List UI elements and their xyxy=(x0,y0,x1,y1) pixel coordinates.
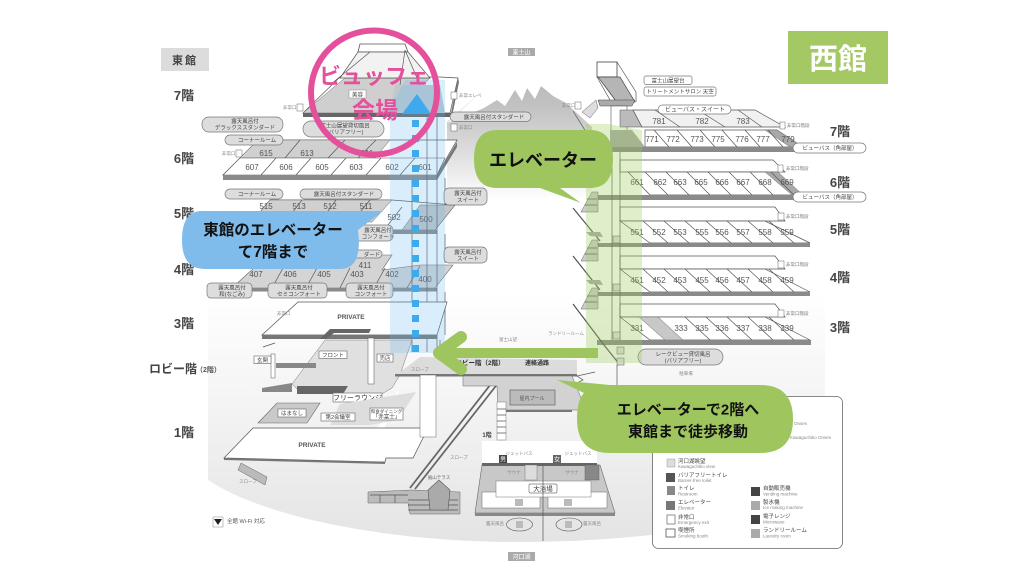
callout: east elevator: 東館のエレベーター xyxy=(203,220,343,239)
east wing: 4th floor: 407 xyxy=(249,270,263,279)
west wing: 4th floor: 458 xyxy=(758,276,772,285)
tag: standard 5F xyxy=(300,189,382,199)
east wing: 6th floor: 615 xyxy=(259,149,273,158)
west wing: 6th floor: 667 xyxy=(736,178,750,187)
callout: west elevator: エレベーター xyxy=(489,150,597,170)
east wing: emergency exit marks: 非常エレベ xyxy=(459,92,482,99)
west wing: 5th floor: 559 xyxy=(780,228,794,237)
west wing: 6th floor xyxy=(597,160,809,200)
floor labels: west: 7階 xyxy=(830,124,850,139)
west wing: 5th floor: 556 xyxy=(715,228,729,237)
floor labels: west: 4階 xyxy=(830,270,850,285)
legend: emergency exit: 非常口 xyxy=(678,513,695,521)
east wing: 4th floor: 403 xyxy=(350,270,364,279)
east wing: 5th floor: 511 xyxy=(360,202,373,211)
label: free lounge: フリーラウンジ xyxy=(333,394,382,402)
indoor pool xyxy=(463,376,586,440)
lake tag: 河口湖 xyxy=(512,553,531,561)
west wing: 6th floor: 662 xyxy=(653,178,667,187)
west wing: 7th floor: 783 xyxy=(736,117,750,126)
tag: deluxe standard: デラックススタンダード xyxy=(215,124,275,132)
tag: observation deck: 富士山展望台 xyxy=(651,76,685,84)
tag: suite 4F xyxy=(444,247,487,263)
tag: observation deck xyxy=(644,76,692,84)
floor labels: east xyxy=(149,48,221,440)
bath hall: 女 xyxy=(554,456,560,464)
bath hall: ジェットバス xyxy=(564,451,592,457)
west wing: 5th floor: 553 xyxy=(673,228,687,237)
callout: buffet venue circle: ビュッフェ xyxy=(319,64,429,89)
floor labels: west xyxy=(830,124,850,335)
west wing: 4th floor: 非常口階段 xyxy=(786,261,809,268)
tag: lake view private bath: (バリアフリー) xyxy=(665,358,701,364)
floor labels: east: 7階 xyxy=(174,88,194,103)
building: west wing xyxy=(499,62,866,398)
east wing: 4th floor: 402 xyxy=(385,270,399,279)
tag: corner room 5F xyxy=(225,189,283,199)
tag: Fuji view private bath: (バリアフリー) xyxy=(327,129,363,136)
bath hall: ジェットバス xyxy=(506,451,533,457)
west wing: 6th floor: 669 xyxy=(780,178,794,187)
arrow: route to east wing xyxy=(439,337,598,369)
east wing: 3rd floor private: PRIVATE xyxy=(337,314,365,321)
legend: microwave: Microwave xyxy=(763,520,785,524)
legend panel: Kawaguchiko Onsen xyxy=(790,435,832,440)
tag: corner room 6F: コーナールーム xyxy=(238,137,277,144)
east wing: first floor: スロープ xyxy=(450,455,468,461)
east wing: 3rd floor private xyxy=(262,302,447,339)
west wing: 3rd floor: 331 xyxy=(630,324,644,333)
tag: lake view private bath xyxy=(638,349,723,365)
east wing: 4th floor: 405 xyxy=(317,270,331,279)
west wing: 7th floor: 781 xyxy=(652,117,666,126)
label: dining akafuji: 「赤富士」 xyxy=(373,412,400,420)
floor labels: east: 3階 xyxy=(174,316,194,331)
tag: semi comfort 4F: セミコンフォート xyxy=(277,291,321,298)
west wing: 6th floor: 663 xyxy=(673,178,687,187)
tag: deluxe standard: 露天風呂付 xyxy=(231,117,259,125)
east wing: 6th floor: 601 xyxy=(418,163,432,172)
west wing: 4th floor xyxy=(597,256,810,296)
tag: deluxe standard xyxy=(202,117,283,132)
callout: buffet venue circle xyxy=(311,30,437,154)
east wing: first floor: PRIVATE xyxy=(298,442,326,449)
east wing: emergency exit marks: 非常口 xyxy=(562,102,576,109)
east wing: 4th floor xyxy=(225,255,453,292)
east wing: emergency exit marks: 非常口 xyxy=(222,150,236,157)
bath hall: 露天風呂 xyxy=(583,521,601,527)
tag: suite 4F: スイート xyxy=(457,256,479,262)
west wing: 7th floor xyxy=(610,110,810,152)
west wing: 3rd floor: 338 xyxy=(758,324,772,333)
floor labels: west: 5階 xyxy=(830,222,850,237)
bath hall: サウナ xyxy=(565,469,579,476)
west wing: 3rd floor: 337 xyxy=(736,324,750,333)
west wing: 4th floor: 459 xyxy=(780,276,794,285)
label: shop: 売店 xyxy=(379,354,391,362)
legend: ice machine xyxy=(751,498,804,510)
east wing: 5th floor: 500 xyxy=(419,215,433,224)
east wing: emergency exit marks: 非常口 xyxy=(283,104,296,111)
east wing: 4th floor: 406 xyxy=(283,270,297,279)
floor labels: east: （2階） xyxy=(196,366,221,374)
slope block xyxy=(238,463,267,485)
west wing: 3rd floor xyxy=(597,304,811,345)
label: front desk: フロント xyxy=(322,352,344,359)
label: conference room 2 xyxy=(321,413,355,421)
bath hall: サウナ xyxy=(507,469,521,476)
tag: comfort 4F: コンフォート xyxy=(355,291,387,298)
tag: view bath corner 7F xyxy=(793,143,866,153)
legend: emergency exit: Emergency exit xyxy=(678,520,710,525)
west tag: 西館 xyxy=(809,43,867,76)
legend: lake view: 河口湖眺望 xyxy=(678,457,706,465)
west wing: 3rd floor: 333 xyxy=(674,324,688,333)
east wing: lobby floor: ロビー階（2階） xyxy=(455,358,505,367)
floor labels: east: 6階 xyxy=(174,151,194,166)
floor labels: east: 1階 xyxy=(174,425,194,440)
tag: comfort 4F: 露天風呂付 xyxy=(357,284,385,292)
floor labels: east: 4階 xyxy=(174,262,194,277)
indoor pool: 屋内プール xyxy=(519,395,545,402)
wifi note xyxy=(213,517,265,527)
east wing: emergency exit marks: 非常口 xyxy=(459,124,472,131)
callout: east elevator: て7階まで xyxy=(238,243,308,261)
west wing: rooftop tower xyxy=(573,62,642,148)
tag: corner room 6F xyxy=(225,135,283,145)
callout: west elevator xyxy=(474,130,613,203)
wifi note: 全館 Wi-Fi 対応 xyxy=(227,517,265,525)
slope block: スロープ xyxy=(239,479,257,485)
room tags: east wing xyxy=(202,112,531,298)
west wing: 5th floor xyxy=(597,207,810,247)
label: dining akafuji xyxy=(370,408,403,420)
tag: comfort 5F: 露天風呂付 xyxy=(364,226,392,234)
east wing: lobby floor: スロープ xyxy=(411,367,429,373)
east wing: 4th floor: 411 xyxy=(359,261,372,270)
label: main bath: 大浴場 xyxy=(533,484,553,493)
west wing: 5th floor: 558 xyxy=(758,228,772,237)
east wing: 5th floor: 513 xyxy=(292,202,306,211)
west wing: 4th floor: 452 xyxy=(652,276,666,285)
callout: east elevator xyxy=(182,211,383,269)
east wing: 5th floor: 502 xyxy=(387,213,401,222)
west wing: 6th floor: 666 xyxy=(715,178,729,187)
tag: comfort 5F: コンフォート xyxy=(362,234,394,240)
east wing: 3rd floor private: 非常口 xyxy=(277,310,290,317)
west wing: 4th floor: 455 xyxy=(695,276,709,285)
floor labels: east: 5階 xyxy=(174,206,194,221)
legend: emergency exit xyxy=(667,513,710,525)
east wing: roof and 7th floor xyxy=(303,44,459,117)
west wing: 4th floor: 457 xyxy=(736,276,750,285)
overlay: east elevator column xyxy=(390,80,445,353)
legend: ice machine: 製氷機 xyxy=(763,498,780,506)
escalator slope xyxy=(410,380,499,489)
east wing: 6th floor: 613 xyxy=(300,149,314,158)
west wing: stairs and core: ランドリールーム xyxy=(548,331,584,337)
east tag: 東館 xyxy=(172,53,198,67)
west wing: 7th floor: 782 xyxy=(695,117,709,126)
tag: view bath suite xyxy=(658,105,731,114)
callout: walk to east wing: 東館まで徒歩移動 xyxy=(628,422,748,440)
legend: ice machine: Ice making machine xyxy=(763,505,804,510)
label: shop xyxy=(377,354,393,362)
east wing: 6th floor: 602 xyxy=(385,163,399,172)
east wing: 6th floor xyxy=(223,140,457,180)
west wing: 3rd floor: 非常口階段 xyxy=(786,310,809,317)
tag: suite 4F: 露天風呂付 xyxy=(454,248,482,256)
east wing: 5th floor: 512 xyxy=(323,202,337,211)
east wing: first floor xyxy=(213,375,499,527)
legend: laundry: Laundry room xyxy=(763,534,791,538)
terrace and gazebo: 展山テラス xyxy=(428,474,451,481)
legend: barrier free toilet: Barrier-free toilet xyxy=(678,478,712,483)
tag: view bath corner 6F: ビューバス（角部屋） xyxy=(803,193,857,201)
west wing: 4th floor: 456 xyxy=(715,276,729,285)
west wing: 7th floor: 773 xyxy=(690,135,704,144)
east wing: lobby floor: 連絡通路 xyxy=(525,359,549,367)
legend: laundry: ランドリールーム xyxy=(763,527,807,534)
bath hall: 露天風呂 xyxy=(486,521,504,527)
label: hamanashi room xyxy=(278,409,306,417)
east wing: elevator core walls xyxy=(412,117,445,352)
east wing: 6th floor: 606 xyxy=(279,163,293,172)
west wing: 7th floor: 非常口階段 xyxy=(787,122,810,129)
bath hall xyxy=(475,441,615,541)
west wing: 6th floor: 661 xyxy=(630,178,644,187)
east wing: 5th floor: 515 xyxy=(259,202,273,211)
east wing: 6th floor: 603 xyxy=(349,163,363,172)
west wing: 7th floor: 776 xyxy=(735,135,749,144)
legend: lake view: Kawaguchiko view xyxy=(678,464,716,469)
east wing: 6th floor: 605 xyxy=(315,163,329,172)
west tag xyxy=(788,31,888,84)
tag: nagomi 4F xyxy=(207,283,252,298)
west wing: 5th floor: 555 xyxy=(695,228,709,237)
legend: barrier free toilet xyxy=(666,472,728,483)
ground shading xyxy=(208,290,825,542)
east wing: 4th floor: 400 xyxy=(418,275,432,284)
tag: comfort 4F xyxy=(346,283,393,298)
west wing: 5th floor: 552 xyxy=(652,228,666,237)
legend: elevator: Elevator xyxy=(678,506,695,510)
legend: vending machine xyxy=(751,484,798,496)
tag: nagomi 4F: 露天風呂付 xyxy=(218,284,246,292)
tag: comfort 5F xyxy=(350,225,394,241)
tag: lake view private bath: レークビュー貸切風呂 xyxy=(655,350,711,358)
west wing: 5th floor: 557 xyxy=(736,228,750,237)
label: conference room 2: 第2会議室 xyxy=(325,413,351,421)
legend: elevator: エレベーター xyxy=(678,498,711,506)
west wing: 7th floor: 779 xyxy=(781,135,795,144)
overlay: west elevator column xyxy=(586,124,642,363)
tag: nagomi 4F: 和(なごみ) xyxy=(219,290,245,298)
floor labels: east: ロビー階 xyxy=(149,361,197,376)
legend: vending machine: 自動販売機 xyxy=(763,484,791,492)
west wing: 7th floor: 777 xyxy=(756,135,770,144)
label: entrance: 玄関 xyxy=(257,356,268,364)
legend: elevator xyxy=(666,498,711,510)
tag: treatment salon: トリートメントサロン 天空 xyxy=(646,88,714,96)
east wing: lobby floor xyxy=(254,338,577,432)
east wing: 6th floor: 611 xyxy=(361,149,374,158)
illustration: Mount Fuji: 富士山 xyxy=(512,48,531,56)
label: dining akafuji: 和食ダイニング xyxy=(371,408,403,415)
west wing: 5th floor: 551 xyxy=(630,228,644,237)
west wing: 6th floor: 668 xyxy=(758,178,772,187)
callout: walk to east wing: エレベーターで2階へ xyxy=(617,402,759,418)
west wing: stairs and core xyxy=(499,152,624,398)
tag: Fuji view private bath xyxy=(303,121,384,137)
west wing: 4th floor: 451 xyxy=(630,276,644,285)
tag: suite 5F: スイート xyxy=(457,197,479,204)
west wing: 5th floor: 非常口階段 xyxy=(786,213,809,220)
legend: smoking booth: Smoking booth xyxy=(678,534,709,538)
annex: pool and bath xyxy=(463,376,615,561)
legend: smoking booth xyxy=(666,526,709,538)
tag: view bath suite: ビューバス・スイート xyxy=(665,106,725,114)
legend: lake view xyxy=(667,457,716,469)
legend: smoking booth: 喫煙所 xyxy=(678,526,695,534)
east wing: emergency exit marks xyxy=(222,92,581,157)
legend: barrier free toilet: バリアフリートイレ xyxy=(678,472,728,479)
legend: restroom: Restroom xyxy=(678,492,698,496)
label: entrance xyxy=(254,356,271,364)
legend: vending machine: Vending machine xyxy=(763,492,798,496)
label: front desk xyxy=(319,351,347,359)
west wing: stairs and core: 富士山望 xyxy=(499,336,517,343)
tag: view bath corner 6F xyxy=(793,192,866,202)
legend: microwave: 電子レンジ xyxy=(763,513,791,520)
legend: laundry xyxy=(751,527,807,538)
terrace and gazebo xyxy=(368,474,460,514)
tag: Fuji view private bath: 富士山展望貸切風呂 xyxy=(320,122,370,130)
indoor pool: 1階 xyxy=(482,431,492,439)
legend: microwave xyxy=(751,513,791,524)
tag: treatment salon xyxy=(644,87,716,96)
callout: walk to east wing xyxy=(557,380,793,453)
tag: standard 4F: ダード xyxy=(364,250,380,258)
building: east wing xyxy=(202,44,581,352)
tag: suite 5F xyxy=(444,188,487,205)
tag: view bath corner 7F: ビューバス（角部屋） xyxy=(803,144,857,152)
label: hamanashi room: はまなし xyxy=(281,410,303,417)
floor labels: west: 6階 xyxy=(830,175,850,190)
west wing: 7th floor: 775 xyxy=(711,135,725,144)
east wing: 5th floor xyxy=(245,200,455,234)
east tag xyxy=(161,48,209,71)
bath hall: 男 xyxy=(500,456,506,464)
tag: semi comfort 4F: 露天風呂付 xyxy=(285,284,313,292)
west wing: 3rd floor: 335 xyxy=(695,324,709,333)
west wing: 7th floor: 771 xyxy=(645,135,659,144)
floor labels: west: 3階 xyxy=(830,320,850,335)
tag: suite 5F: 露天風呂付 xyxy=(454,189,482,197)
illustration: Mount Fuji xyxy=(447,48,592,200)
room tags: west wing xyxy=(638,76,866,365)
tag: semi comfort 4F xyxy=(268,283,327,298)
legend panel: Onsen xyxy=(794,421,808,426)
west wing: 3rd floor: 336 xyxy=(715,324,729,333)
building: west wing: 駐車場 xyxy=(679,370,693,377)
west wing: 7th floor: 772 xyxy=(666,135,680,144)
tag: corner room 5F: コーナールーム xyxy=(238,191,277,198)
legend panel xyxy=(652,396,842,548)
west wing: 4th floor: 453 xyxy=(673,276,687,285)
west wing: 6th floor: 非常口階段 xyxy=(786,165,809,172)
route: blue dashed line with arrowhead xyxy=(402,94,431,352)
west wing: 6th floor: 665 xyxy=(694,178,708,187)
tag: standard 6F xyxy=(450,112,531,122)
east wing: roof and 7th floor: 美容 xyxy=(352,90,363,98)
west wing: 3rd floor: 339 xyxy=(780,324,794,333)
tag: standard 4F xyxy=(340,250,382,258)
callout: buffet venue circle: 会場 xyxy=(352,97,398,123)
legend: restroom xyxy=(667,486,698,496)
lake tag xyxy=(508,552,535,561)
tag: standard 6F: 露天風呂付スタンダード xyxy=(464,113,524,121)
legend: restroom: トイレ xyxy=(678,486,695,492)
east wing: 6th floor: 607 xyxy=(245,163,259,172)
tag: standard 5F: 露天風呂付スタンダード xyxy=(314,190,374,198)
